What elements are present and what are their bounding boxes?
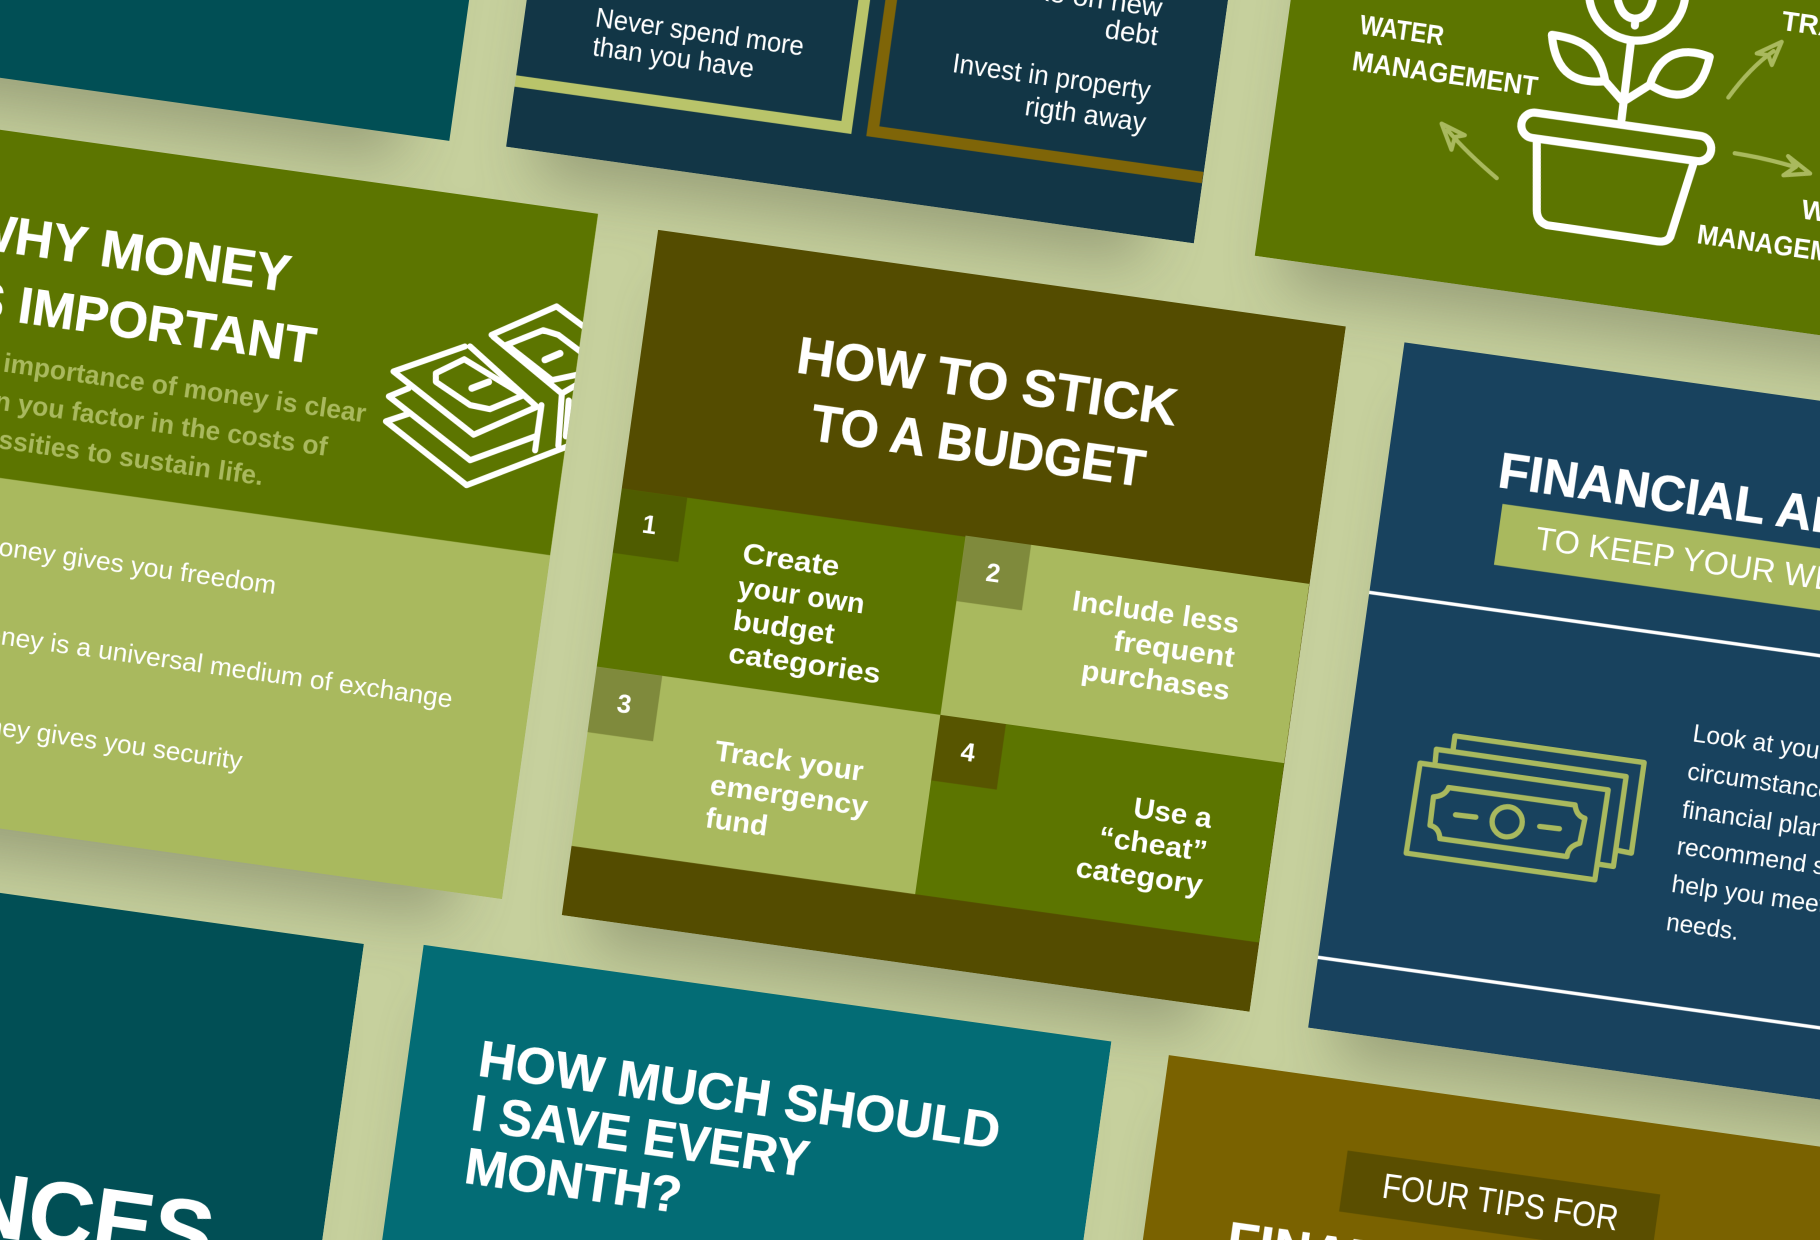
step 3: emergency xyxy=(708,769,870,823)
panel: how to stick to a budget xyxy=(562,230,1345,1014)
heading: I SAVE EVERY xyxy=(468,1084,813,1188)
brown frame xyxy=(866,0,1241,183)
label: waste management xyxy=(1698,200,1820,260)
panel: why money is important xyxy=(0,130,598,899)
heading: HOW MUCH SHOULD xyxy=(475,1030,1004,1159)
step 3: 3 xyxy=(615,690,633,719)
panel: top green slide with plant xyxy=(1254,0,1820,354)
text: never spend more: than you have xyxy=(591,31,756,84)
step 1: Create xyxy=(740,538,841,583)
heading: TO A BUDGET xyxy=(807,394,1149,498)
heading: MONTH? xyxy=(461,1137,685,1224)
panel: four tips for financial xyxy=(1072,1055,1820,1240)
panel: how much should I save xyxy=(327,945,1111,1240)
step 1 xyxy=(597,488,965,715)
list of reasons xyxy=(0,542,452,774)
step 3: Track your xyxy=(713,736,865,788)
heading xyxy=(798,336,1178,486)
text: debt and property: rigth away xyxy=(1023,90,1148,138)
step 2: frequent xyxy=(1111,625,1237,674)
heading xyxy=(0,216,318,362)
step 1: your own xyxy=(736,571,867,621)
icon: stack of bills xyxy=(382,303,583,488)
step 4: “cheat” xyxy=(1097,821,1209,868)
step 1: budget xyxy=(731,605,837,651)
label: water management xyxy=(1352,14,1539,96)
step 4: Use a xyxy=(1131,792,1215,835)
step 1: 1 xyxy=(640,510,658,540)
label: water management: WATER xyxy=(1358,9,1446,51)
heading xyxy=(466,1040,999,1212)
icon: growth arrows xyxy=(1442,42,1810,178)
intro text xyxy=(0,352,366,485)
step 3: fund xyxy=(703,802,770,843)
step 2: purchases xyxy=(1079,655,1232,707)
body text xyxy=(1666,724,1820,940)
text: debt and property: debt xyxy=(1103,13,1161,51)
step 3 xyxy=(572,667,940,894)
step 4: 4 xyxy=(959,738,978,768)
text: never spend more: Never spend more xyxy=(594,2,806,62)
text: never spend more xyxy=(594,8,803,78)
green frame xyxy=(515,0,891,134)
step 2 xyxy=(940,536,1309,763)
text: debt and property xyxy=(946,0,1165,138)
step 4: category xyxy=(1074,852,1205,901)
heading: HOW TO STICK xyxy=(794,327,1181,437)
panel: bottom-left teal finances slide xyxy=(0,892,364,1240)
icon: plant in pot xyxy=(1520,0,1713,242)
text: debt and property: Invest in property xyxy=(951,47,1153,106)
icon: banknotes xyxy=(1406,736,1644,880)
panel: top navy slide with habits xyxy=(506,0,1290,245)
step 2: 2 xyxy=(984,559,1002,588)
panel: top-left teal slide xyxy=(0,0,546,141)
panel: financial advice xyxy=(1308,342,1820,1126)
label: water management: MANAGEMENT xyxy=(1350,45,1540,102)
step 1: categories xyxy=(726,637,883,690)
step 2: Include less xyxy=(1070,585,1241,641)
body text: needs. xyxy=(1664,909,1741,946)
step 4 xyxy=(915,715,1284,943)
tag: four tips for xyxy=(1339,1151,1660,1240)
